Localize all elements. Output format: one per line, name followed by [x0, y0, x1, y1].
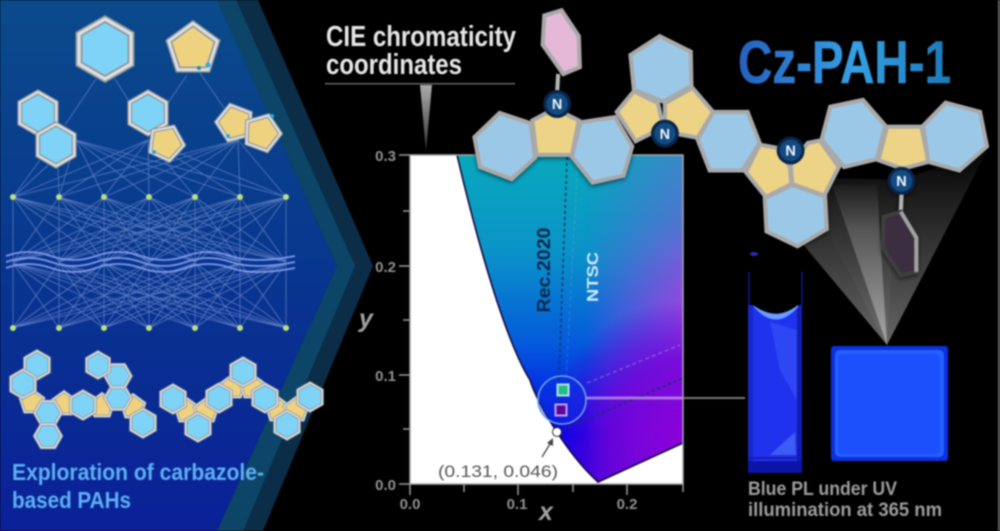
lower fully connected layer [13, 263, 286, 328]
plot background [410, 155, 683, 484]
marker: Cz-PAH-1 coordinate point [552, 428, 562, 436]
neural network diagram [6, 73, 295, 331]
connections from fragments to network [13, 73, 286, 197]
axis title x: x [537, 498, 554, 526]
nitrogen labels: N [552, 97, 562, 113]
pentagon rings [532, 88, 928, 197]
heading: CIE chromaticity coordinates [326, 21, 516, 81]
hexagon rings [474, 36, 987, 246]
icon: hexagon building block [79, 19, 131, 79]
panel: exploration of PAHs (blue chevron) [0, 0, 373, 531]
heading: CIE chromaticity coordinates: CIE chromaticity [326, 21, 516, 53]
y axis tick labels: 0.2 [375, 259, 396, 276]
nitrogen labels [552, 97, 907, 190]
axis ticks [399, 155, 683, 495]
icon: two fused pentagons [213, 100, 285, 153]
x axis tick labels: 0.1 [507, 496, 527, 513]
arrow to coordinate point [542, 438, 553, 457]
chevron outer band [217, 0, 373, 531]
molecule: right candidate PAH [161, 358, 322, 441]
label: coordinate value: (0.131, 0.046) [438, 462, 558, 481]
magnifier circle and leader line [538, 376, 745, 424]
axis title y: y [357, 305, 374, 333]
nitrogen labels: N [660, 127, 670, 143]
molecule: left candidate PAH [11, 351, 155, 454]
caption: blue PL under UV illumination: Blue PL under UV [748, 479, 897, 500]
y axis tick labels: 0.0 [375, 477, 396, 494]
plot frame [410, 155, 683, 484]
caption: blue PL under UV illumination [748, 479, 942, 521]
nitrogen labels: N [896, 174, 907, 190]
network nodes upper row [10, 194, 289, 200]
photo: thin film under UV [831, 346, 948, 461]
upper fully connected layer [13, 197, 286, 262]
heading rule with pointer [325, 83, 515, 151]
bonds to phenyl rings [557, 74, 902, 212]
y axis tick labels [375, 148, 396, 494]
chevron inner band [217, 0, 355, 531]
wavy break lines [6, 252, 295, 272]
molecule: Cz-PAH-1 structure [474, 10, 987, 276]
network nodes lower row [10, 325, 289, 331]
title: Cz-PAH-1: Cz-PAH-1 [738, 29, 951, 96]
cuvette solution [748, 305, 802, 463]
chart: CIE chromaticity diagram [357, 148, 745, 526]
x axis tick labels [400, 496, 637, 513]
cuvette base [748, 461, 802, 473]
marker: Rec.2020 blue point [556, 404, 566, 416]
light beam from molecule to film [746, 151, 987, 345]
caption: exploration of carbazole-based PAHs [12, 459, 264, 513]
icon: two fused hexagons [20, 92, 74, 166]
spectral locus gamut [457, 155, 683, 482]
nitrogen atoms [545, 92, 914, 193]
y axis tick labels: 0.3 [375, 148, 396, 165]
heading: CIE chromaticity coordinates: coordinates [326, 49, 462, 81]
marker: NTSC blue point [558, 384, 568, 396]
icon: hexagon fused with pentagon [130, 92, 189, 163]
chevron blue fill [0, 0, 337, 531]
label Rec.2020: Rec.2020 [534, 228, 554, 312]
bottom phenyl ring [883, 212, 916, 276]
caption: exploration of carbazole-based PAHs: Exploration of carbazole- [12, 459, 264, 485]
y axis tick labels: 0.1 [375, 368, 396, 385]
Rec.2020 dashed line [557, 157, 683, 432]
x axis tick labels: 0.2 [617, 496, 637, 513]
label NTSC: NTSC [585, 251, 602, 302]
caption: exploration of carbazole-based PAHs: based PAHs [12, 487, 131, 513]
icon: pentagon building block [169, 24, 217, 70]
nitrogen labels: N [785, 144, 796, 160]
caption: blue PL under UV illumination: illumination at 365 nm [748, 500, 942, 521]
top phenyl ring [543, 10, 580, 74]
cuvette meniscus [754, 304, 798, 320]
x axis tick labels: 0.0 [400, 496, 420, 513]
photo: cuvette under UV [748, 252, 802, 473]
cuvette top outline [749, 272, 802, 305]
NTSC dashed line [566, 157, 578, 380]
